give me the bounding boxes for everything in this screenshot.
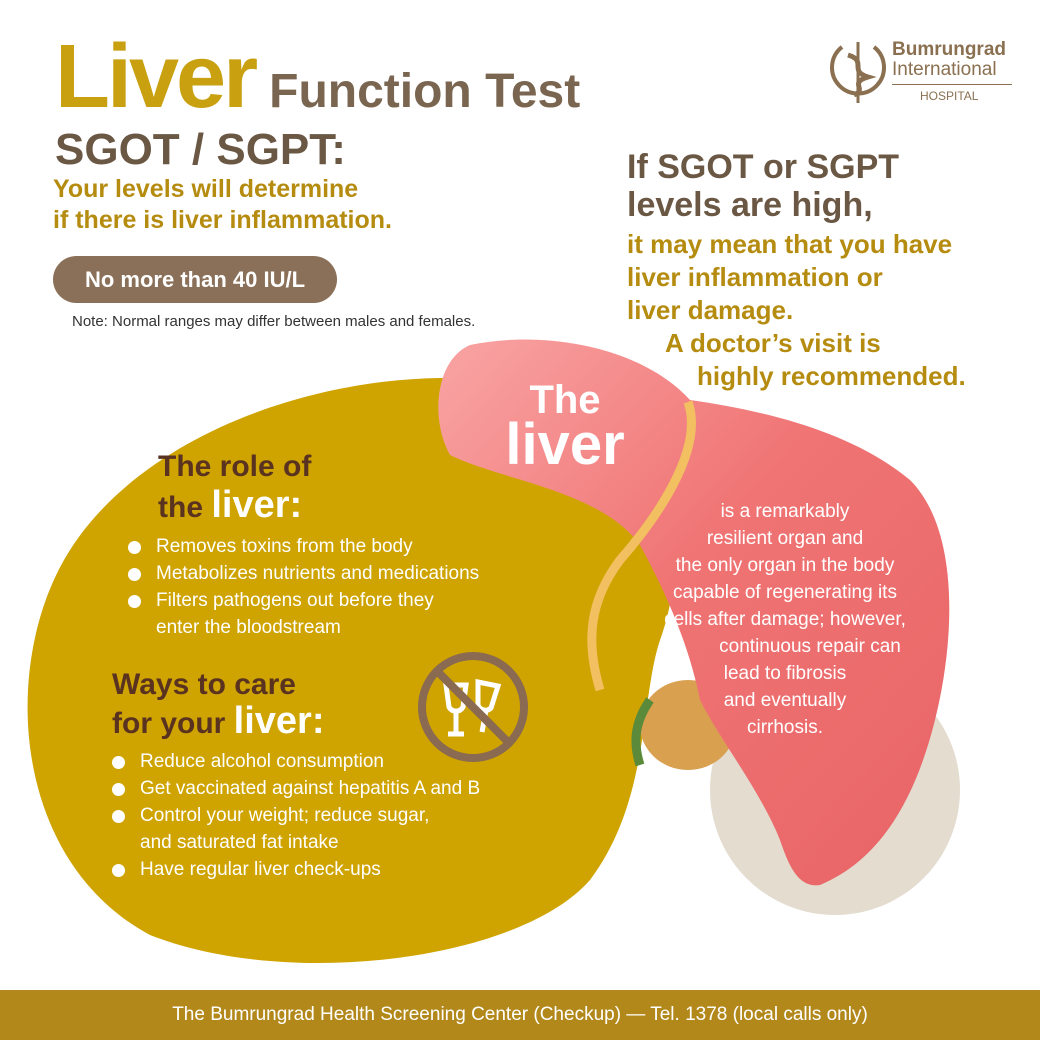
logo — [830, 39, 1012, 103]
right heading: levels are high, — [627, 186, 873, 224]
liver — [438, 340, 949, 885]
liver description: the only organ in the body — [676, 555, 894, 576]
right text: highly recommended. — [697, 361, 966, 391]
right heading: If SGOT or SGPT — [627, 148, 899, 186]
heading: role: the liver: — [158, 484, 302, 526]
subheading: Your levels will determine — [53, 175, 358, 203]
logo: Bumrungrad — [892, 39, 1006, 60]
liver description: and eventually — [724, 690, 846, 711]
list: care: Get vaccinated against hepatitis A and B — [140, 778, 480, 799]
liver description: cirrhosis. — [747, 717, 823, 738]
list: care: and saturated fat intake — [140, 832, 339, 853]
heading: role — [158, 450, 312, 526]
footer — [0, 990, 1040, 1040]
list: care: Reduce alcohol consumption — [140, 751, 384, 772]
liver description: lead to fibrosis — [724, 663, 846, 684]
liver description: is a remarkably — [721, 501, 849, 522]
heading: role: The role of — [158, 450, 311, 483]
title: Liver Function Test — [55, 27, 580, 127]
list: roles: Filters pathogens out before they — [156, 590, 434, 611]
panel: role of the liver — [128, 450, 479, 638]
liver description: resilient organ and — [707, 528, 863, 549]
icon: no alcohol — [418, 652, 528, 762]
list: care: Control your weight; reduce sugar, — [140, 805, 429, 826]
list: care — [112, 751, 480, 880]
beige circle — [710, 665, 960, 915]
heading: SGOT / SGPT: SGOT / SGPT: — [55, 125, 346, 174]
logo: International — [892, 59, 997, 80]
pill: normal range: No more than 40 IU/L — [85, 267, 305, 292]
right text: liver inflammation or — [627, 262, 883, 292]
right text: it may mean that you have — [627, 229, 952, 259]
pill: normal range — [53, 256, 337, 303]
logo: HOSPITAL — [920, 89, 978, 103]
list: roles: Metabolizes nutrients and medications — [156, 563, 479, 584]
list: roles: enter the bloodstream — [156, 617, 341, 638]
liver label: The — [529, 378, 601, 422]
liver label — [505, 378, 625, 477]
heading: care: Ways to care — [112, 668, 296, 701]
liver description — [664, 501, 906, 738]
liver description: cells after damage; however, — [664, 609, 906, 630]
list: care: Have regular liver check-ups — [140, 859, 381, 880]
right heading — [627, 148, 899, 224]
subheading — [53, 175, 392, 234]
liver description: capable of regenerating its — [673, 582, 897, 603]
right text — [627, 229, 966, 391]
yellow blob — [28, 377, 676, 963]
list: roles — [128, 536, 479, 638]
liver description: continuous repair can — [719, 636, 901, 657]
list: roles: Removes toxins from the body — [156, 536, 413, 557]
heading: care: for your liver: — [112, 700, 324, 742]
note: Note: Normal ranges may differ between males and females. — [72, 313, 475, 330]
liver label: liver — [505, 412, 625, 477]
footer: The Bumrungrad Health Screening Center (Checkup) — Tel. 1378 (local calls only) — [172, 1004, 868, 1025]
right text: liver damage. — [627, 295, 793, 325]
subheading: if there is liver inflammation. — [53, 206, 392, 234]
panel: ways to care — [112, 668, 480, 880]
right text: A doctor’s visit is — [665, 328, 881, 358]
heading: care — [112, 668, 324, 742]
